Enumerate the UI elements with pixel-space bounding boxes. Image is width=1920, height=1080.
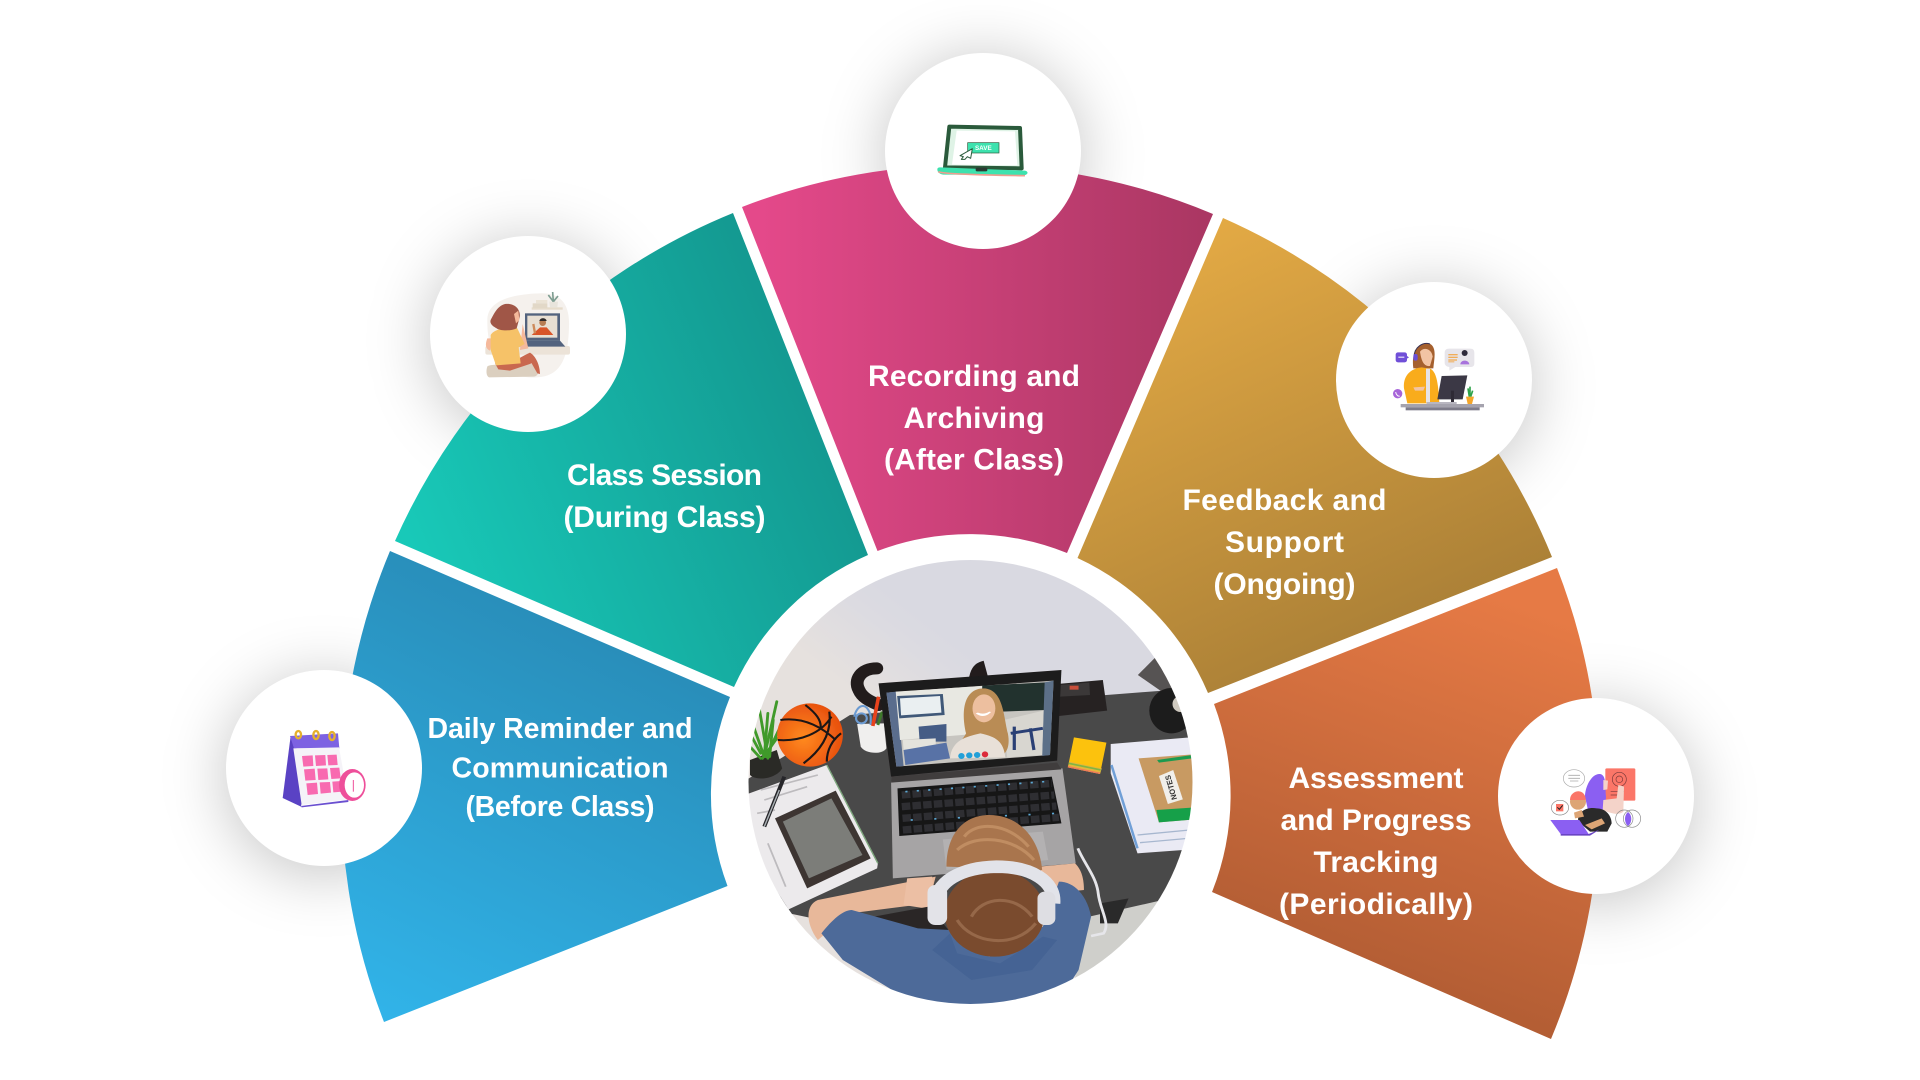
icon: calendar with clock [283,731,366,807]
text: daily reminder label: Communication [452,752,668,784]
speaker device [1057,680,1107,716]
headphone hook [857,668,879,705]
stack of books: NOTES [1163,774,1179,801]
icon circle: class session [430,236,626,432]
icon: laptop with save button: SAVE [975,145,992,152]
stack of books [1110,738,1192,854]
panel: recording and archiving sector [742,165,1213,553]
notepad with tablet [736,765,878,909]
pencil cup [854,697,886,753]
text: recording and archiving label: Archiving [904,402,1044,435]
student [808,815,1091,1010]
text: recording and archiving label: (After Class) [884,444,1064,476]
text: feedback and support label: (Ongoing) [1214,568,1356,601]
text: class session label: Class Session [567,459,762,492]
charging cable [1078,848,1106,936]
icon circle: calendar [226,670,422,866]
text: assessment and progress label: and Progress [1280,804,1472,837]
icon circle: recording [885,53,1081,249]
text: assessment and progress label: (Periodically) [1279,888,1473,921]
icon circle: feedback [1336,282,1532,478]
text: recording and archiving label [868,360,1080,476]
icon: girl on a video call [485,292,570,377]
icon circle: assessment [1498,698,1694,894]
panel: assessment and progress sector [1212,568,1600,1039]
text: daily reminder label: Daily Reminder and [428,713,692,745]
text: feedback and support label [1182,484,1386,601]
panel: class session sector [395,213,868,687]
basketball [777,703,843,767]
plant [750,702,782,778]
text: class session label [564,459,766,534]
text: assessment and progress label: Assessment [1288,762,1464,795]
central photo: student at desk on a video call [748,560,1192,1004]
soft shadows behind icon circles [224,55,1696,904]
panel: feedback and support sector [1078,218,1552,693]
text: assessment and progress label: Tracking [1314,846,1438,879]
text: feedback and support label: Support [1225,526,1344,559]
laptop [879,670,1076,878]
text: class session label: (During Class) [564,501,766,534]
text: daily reminder label [428,713,692,823]
text: daily reminder label: (Before Class) [466,791,654,823]
text: feedback and support label: Feedback and [1182,484,1386,517]
sticky note [1068,737,1106,774]
text: recording and archiving label: Recording and [868,360,1080,393]
icon: support agent at desk [1393,343,1484,410]
lamp [1138,658,1186,734]
icon: two people reviewing progress [1550,768,1641,836]
icon: laptop with save button [937,127,1028,176]
text: assessment and progress label [1279,762,1473,921]
panel: daily reminder sector [341,551,730,1022]
